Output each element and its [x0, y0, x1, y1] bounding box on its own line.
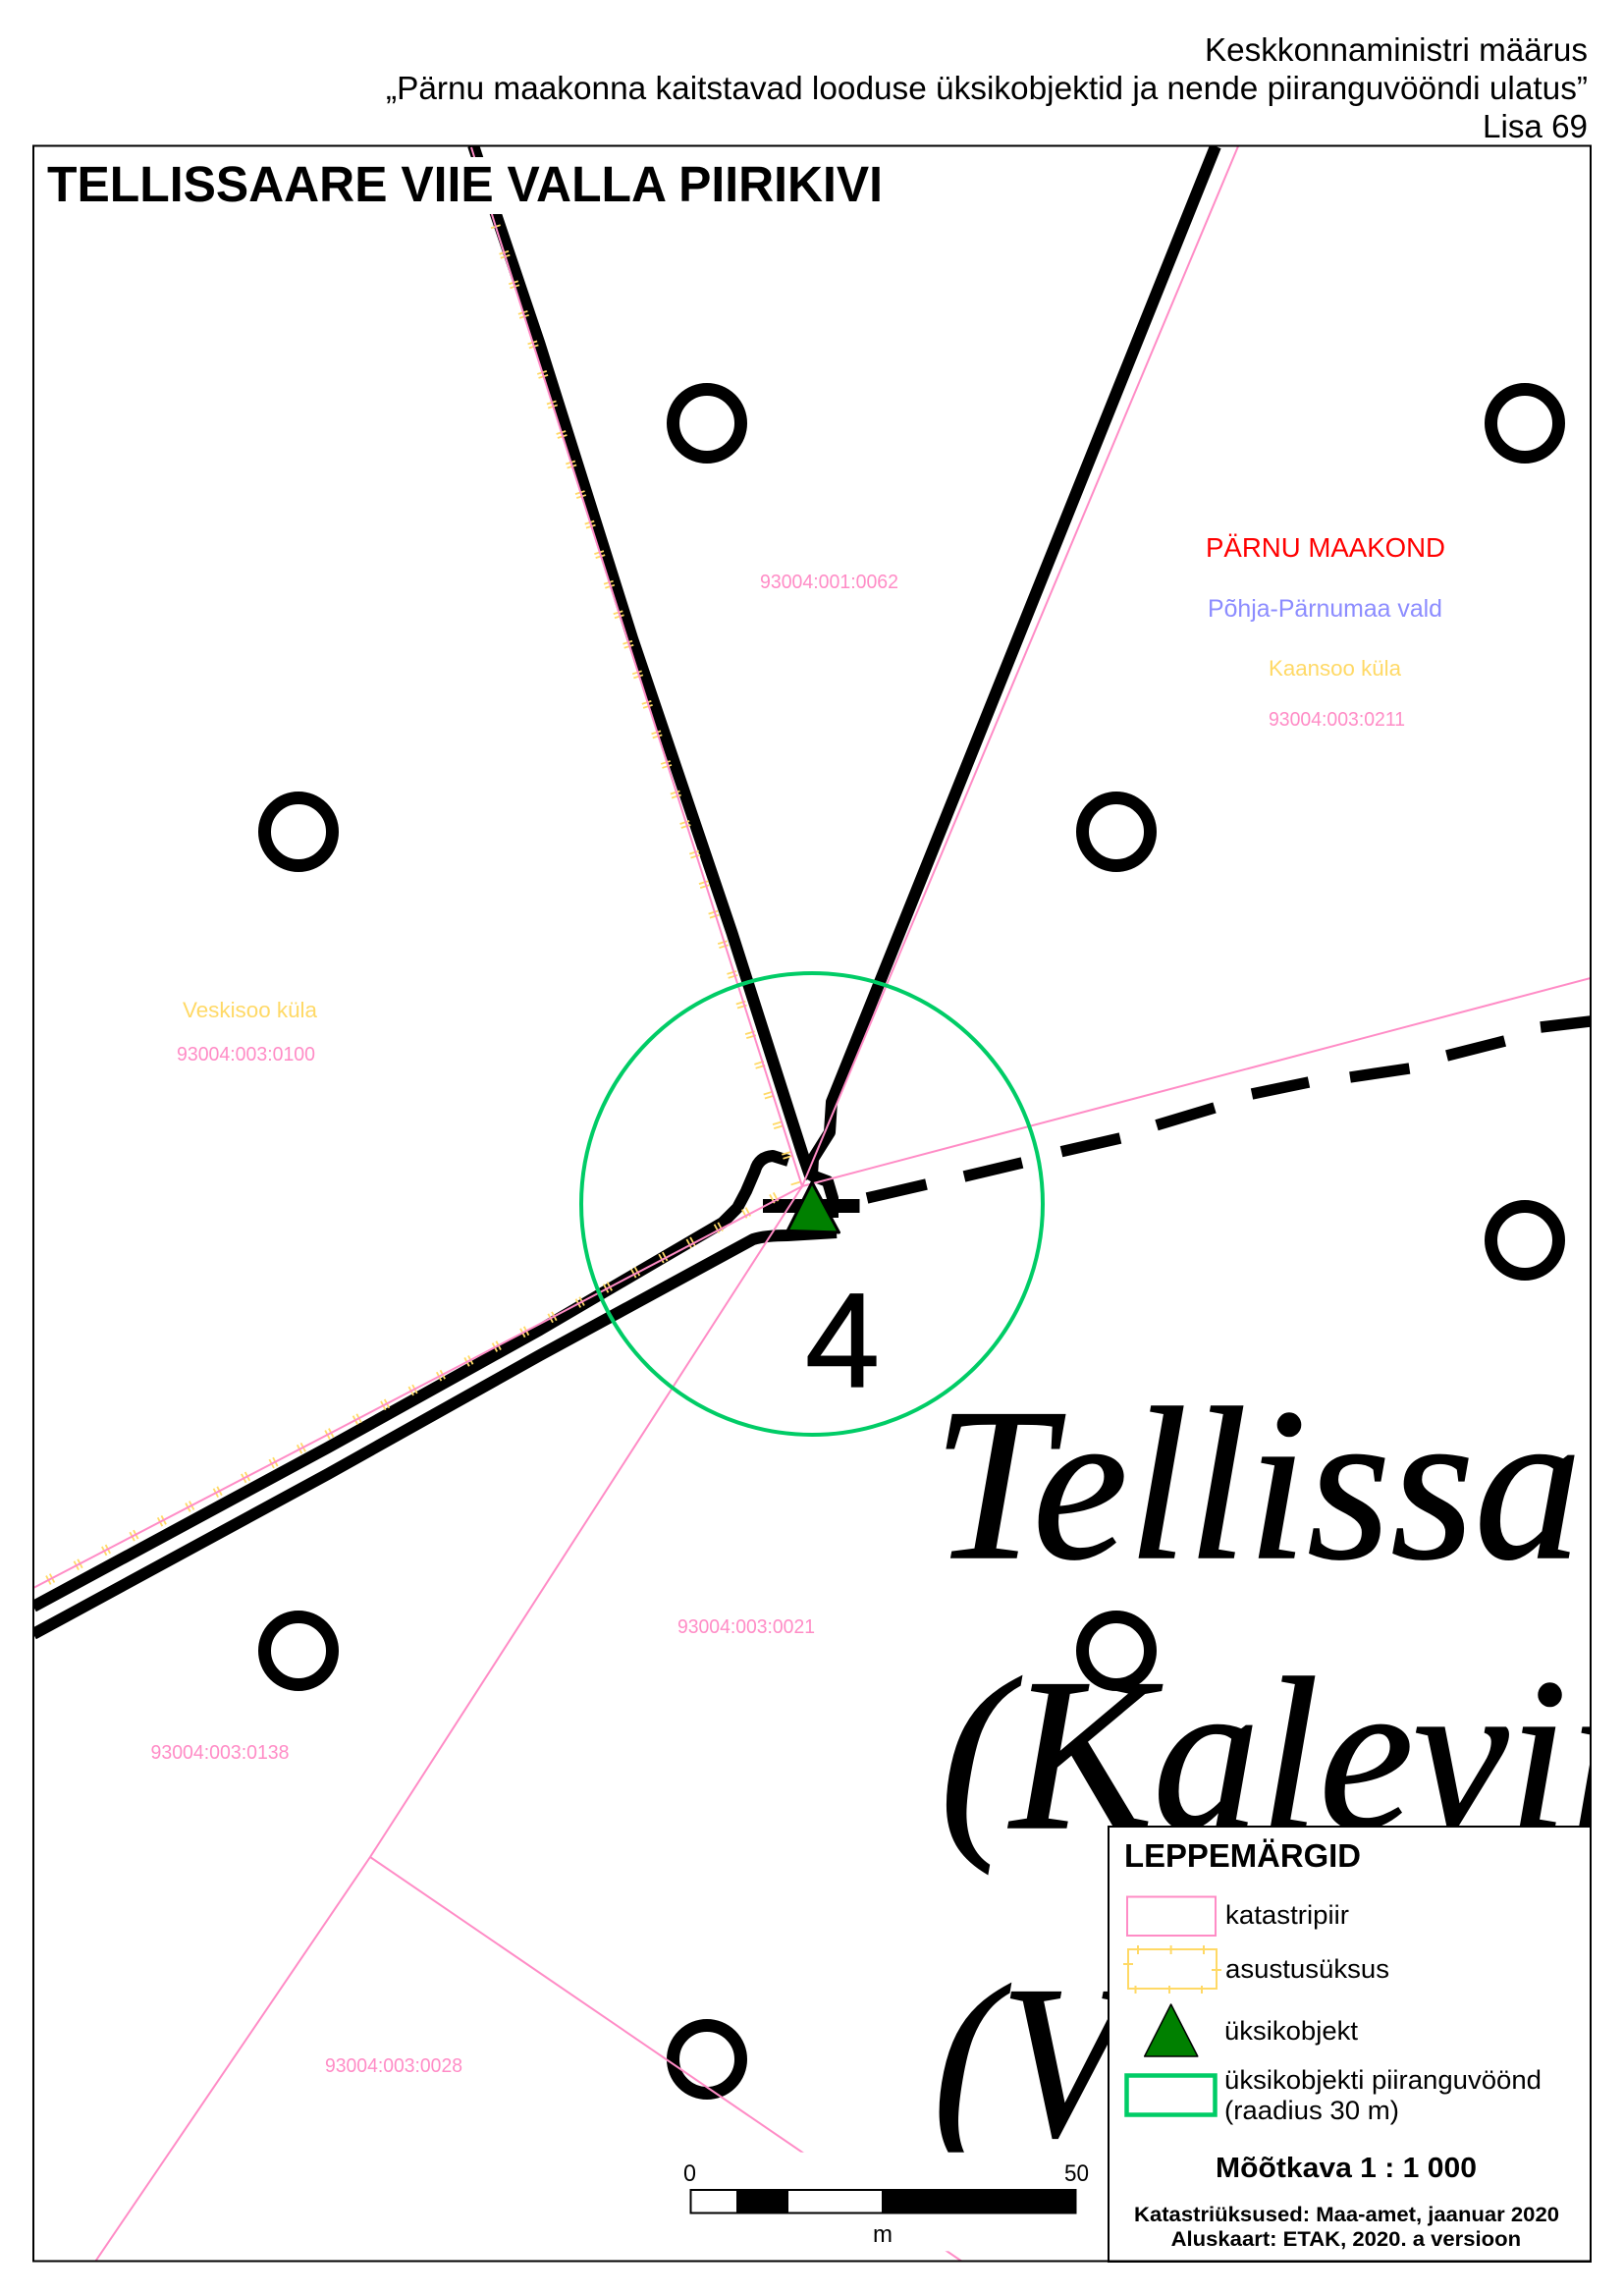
cadastral unit labels: 93004:003:0138 — [151, 1742, 289, 1764]
cadastral unit labels: 93004:003:0021 — [677, 1616, 815, 1638]
data sources: Aluskaart: ETAK, 2020. a versioon — [1171, 2227, 1521, 2251]
large map lettering: Tellissa — [933, 1364, 1582, 1606]
region and municipality labels: Veskisoo küla — [183, 998, 318, 1022]
legend: restriction zone: (raadius 30 m) — [1224, 2096, 1399, 2125]
cadastral unit labels — [151, 572, 1405, 2077]
legend: settlement unit: asustusüksus — [1225, 1954, 1389, 1984]
header: regulation reference — [386, 31, 1588, 144]
cadastral unit labels: 93004:003:0211 — [1269, 709, 1405, 731]
large map lettering — [939, 1405, 1590, 2153]
header: regulation reference: Lisa 69 — [1483, 108, 1588, 144]
region and municipality labels: Põhja-Pärnumaa vald — [1208, 595, 1442, 623]
black ring symbols — [265, 389, 1559, 2094]
large map lettering: (Kalevii — [940, 1634, 1624, 1876]
legend: restriction zone — [1127, 2065, 1542, 2125]
legend: settlement unit — [1123, 1945, 1389, 1994]
legend panel — [1109, 1827, 1591, 2262]
region and municipality labels — [183, 532, 1445, 1022]
cadastral unit labels: 93004:003:0028 — [325, 2055, 462, 2077]
title: TELLISSAARE VIIE VALLA PIIRIKIVI — [47, 156, 883, 212]
data sources: Katastriüksused: Maa-amet, jaanuar 2020 — [1134, 2203, 1559, 2226]
legend: single object — [1145, 2004, 1358, 2056]
map scale: Mõõtkava 1 : 1 000 — [1216, 2153, 1477, 2184]
roads — [33, 145, 1216, 1634]
region and municipality labels: PÄRNU MAAKOND — [1206, 532, 1445, 563]
region and municipality labels: Kaansoo küla — [1269, 656, 1402, 681]
scale bar: 0 — [683, 2160, 696, 2187]
data sources — [1134, 2203, 1559, 2251]
cadastral unit labels: 93004:003:0100 — [177, 1044, 315, 1066]
cadastral unit labels: 93004:001:0062 — [760, 572, 898, 593]
number 4: 4 — [805, 1266, 880, 1416]
header: regulation reference: „Pärnu maakonna kaitstavad looduse üksikobjektid ja nende piiranguvööndi ulatus” — [386, 70, 1588, 106]
large map lettering: (V — [933, 1941, 1144, 2183]
scale bar: m — [873, 2221, 893, 2248]
scale bar: 50 — [1064, 2160, 1089, 2187]
legend: single object: üksikobjekt — [1224, 2016, 1358, 2046]
settlement boundary ticks — [33, 224, 797, 1588]
legend heading: LEPPEMÄRGID — [1124, 1837, 1361, 1874]
object restriction zone circle — [581, 973, 1043, 1435]
scale bar — [668, 2153, 1109, 2251]
dashed road — [867, 1021, 1591, 1198]
legend: restriction zone: üksikobjekti piiranguvöönd — [1224, 2065, 1542, 2095]
legend: cadastral boundary: katastripiir — [1225, 1900, 1349, 1930]
legend: cadastral boundary — [1127, 1897, 1349, 1936]
object triangle — [787, 1182, 839, 1232]
header: regulation reference: Keskkonnaministri määrus — [1205, 31, 1588, 68]
